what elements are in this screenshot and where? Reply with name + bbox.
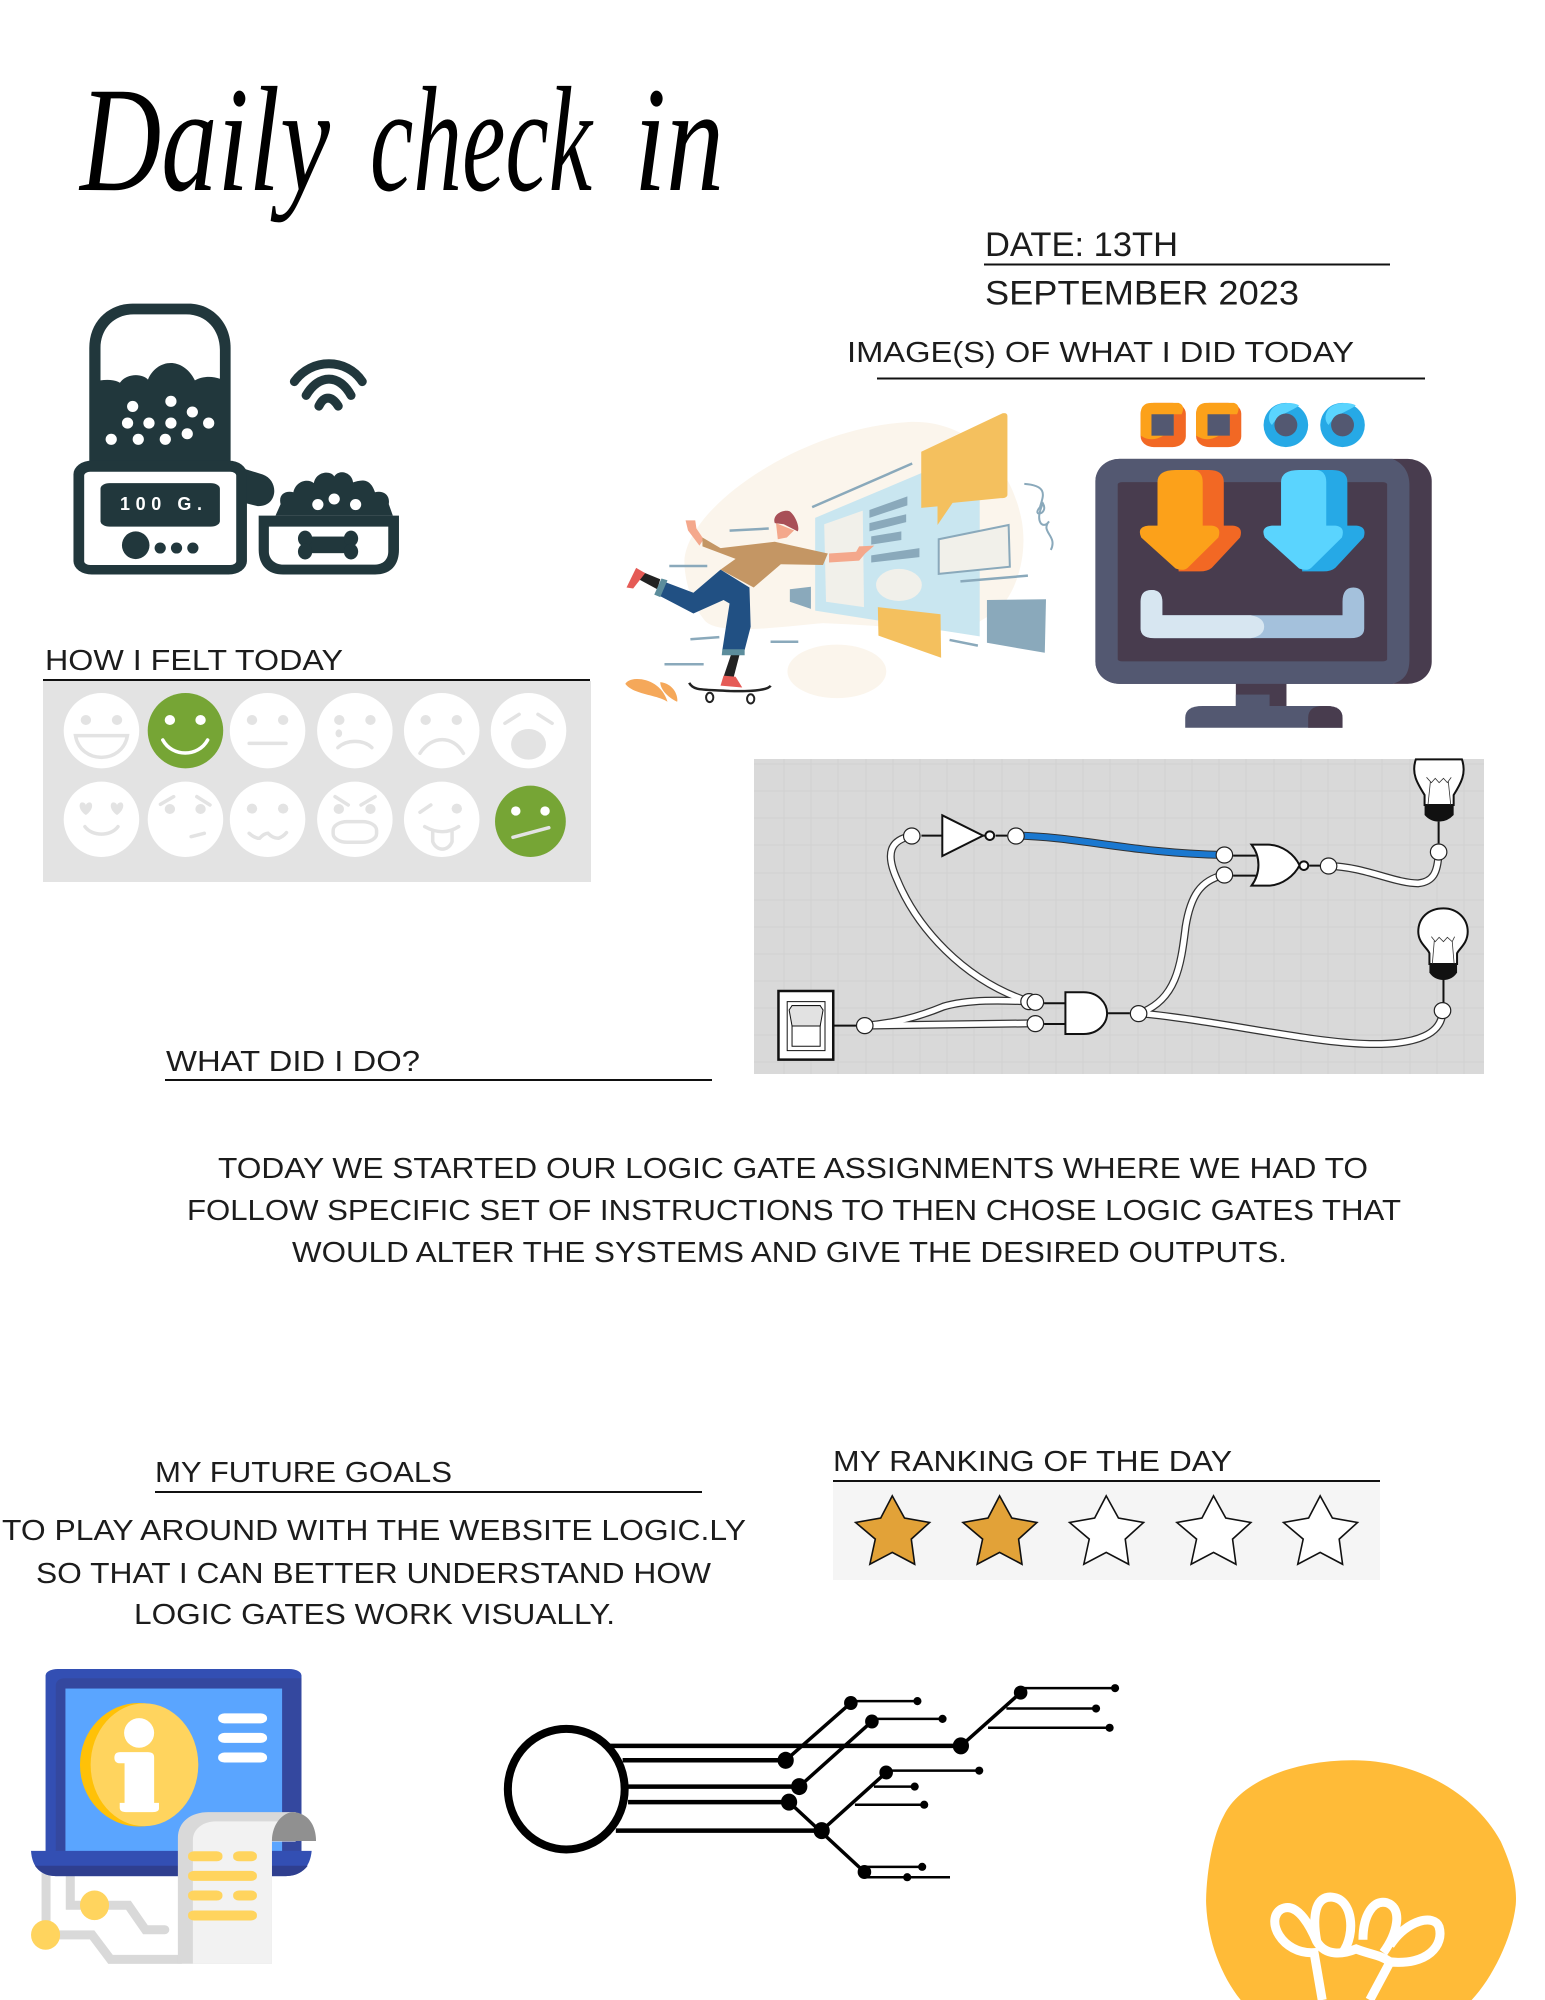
- face: queasy: [230, 782, 305, 857]
- face: winking tongue: [404, 782, 479, 857]
- panel: mood faces: [43, 681, 591, 882]
- panel: star rating: [833, 1482, 1380, 1580]
- title: Daily: [78, 57, 330, 223]
- heading: my ranking of the day: MY RANKING OF THE DAY: [833, 1446, 1232, 1478]
- switch: [778, 991, 833, 1060]
- NOT gate: [942, 815, 994, 856]
- illustration: monitor with download arrows: [1095, 403, 1432, 728]
- panel: logic gate circuit: [754, 759, 1484, 1074]
- icon: smart pet feeder: 100 G.: [120, 494, 202, 514]
- face: laughing: [64, 693, 139, 768]
- face: smiling selected: [148, 693, 223, 768]
- date block: DATE: 13TH: [985, 226, 1178, 264]
- face: sad: [404, 693, 479, 768]
- date block: SEPTEMBER 2023: [985, 274, 1299, 312]
- face: crying: [317, 693, 393, 768]
- heading: how I felt today: HOW I FELT TODAY: [45, 645, 343, 677]
- heading: images of what I did today: IMAGE(S) OF WHAT I DID TODAY: [847, 337, 1354, 369]
- face: angry: [317, 782, 393, 857]
- icon: orange arrow: [1140, 470, 1241, 571]
- light bulb top: [1414, 759, 1464, 822]
- title: in: [634, 57, 724, 223]
- icon: tray: [1141, 587, 1364, 638]
- text block: what did I do description: WOULD ALTER THE SYSTEMS AND GIVE THE DESIRED OUTPUTS.: [292, 1237, 1287, 1269]
- face: in love: [64, 782, 139, 857]
- icons: orange square buttons: [1141, 403, 1241, 447]
- illustration: circuit network lines: [508, 1684, 1119, 1881]
- icons: blue round buttons: [1264, 403, 1365, 447]
- text block: what did I do description: TODAY WE STARTED OUR LOGIC GATE ASSIGNMENTS WHERE WE HAD TO: [218, 1153, 1368, 1185]
- face: skeptical: [148, 782, 223, 857]
- text block: future goals: SO THAT I CAN BETTER UNDERSTAND HOW: [36, 1558, 712, 1590]
- text block: what did I do description: FOLLOW SPECIFIC SET OF INSTRUCTIONS TO THEN CHOSE LOGIC GATES THAT: [187, 1195, 1401, 1227]
- connection nodes: [857, 828, 1451, 1034]
- text block: what did I do description: [187, 1153, 1401, 1269]
- heading: my future goals: MY FUTURE GOALS: [155, 1457, 452, 1489]
- face: unsure selected: [495, 786, 566, 857]
- face: neutral: [230, 693, 305, 768]
- icon: scroll: [178, 1812, 316, 1964]
- title: check: [370, 57, 594, 223]
- title: [78, 57, 724, 223]
- heading: what did I do: WHAT DID I DO?: [166, 1046, 420, 1078]
- icon: yellow light bulb: [1206, 1760, 1516, 2000]
- icon: blue arrow: [1263, 470, 1365, 571]
- NOR gate: [1252, 845, 1308, 886]
- illustration: laptop with info icon and scroll: [31, 1669, 316, 1964]
- AND gate: [1065, 992, 1107, 1034]
- icon: info coin: [80, 1703, 198, 1827]
- icon: smart pet feeder: [73, 304, 399, 575]
- text block: future goals: [2, 1515, 746, 1631]
- text block: future goals: TO PLAY AROUND WITH THE WEBSITE LOGIC.LY: [2, 1515, 746, 1547]
- wires: [834, 822, 1443, 1044]
- text block: future goals: LOGIC GATES WORK VISUALLY.: [134, 1599, 615, 1631]
- date block: [984, 226, 1390, 312]
- light bulb bottom: [1418, 908, 1468, 980]
- face: shocked: [491, 693, 566, 768]
- illustration: skater with floating web panels: [625, 413, 1053, 704]
